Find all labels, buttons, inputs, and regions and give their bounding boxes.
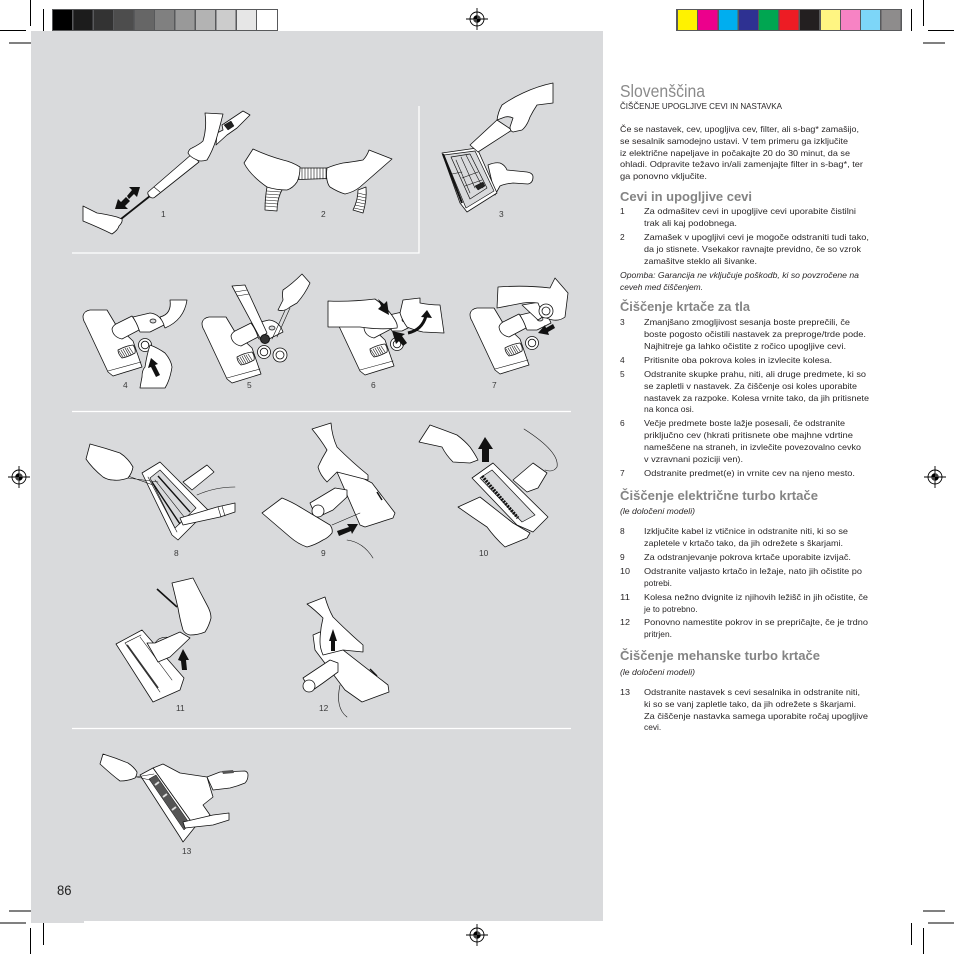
instructions 8 to 12: je to potrebno. xyxy=(643,604,698,614)
instructions 3 to 7: 4 xyxy=(620,355,625,365)
step number 8: 8 xyxy=(174,548,179,558)
instructions 1 and 2: 1 xyxy=(620,206,625,216)
illustration 2: squeezing the hose xyxy=(244,149,392,213)
step number 4: 4 xyxy=(123,380,128,390)
instructions 8 to 12: 9 xyxy=(620,552,625,562)
instructions 3 to 7: 6 xyxy=(620,418,625,428)
instructions 3 to 7: Pritisnite oba pokrova koles in izvlecite kolesa. xyxy=(644,355,832,365)
instructions 3 to 7: priključno cev (hkrati pritisnete obe majhne vdrtine xyxy=(644,430,853,440)
instructions 1 and 2: Za odmašitev cevi in upogljive cevi uporabite čistilni xyxy=(644,206,856,216)
divider under steps 4 to 7 xyxy=(72,410,571,412)
registration mark: bottom xyxy=(466,924,488,946)
step number 5: 5 xyxy=(247,380,252,390)
section heading: floor brush: Čiščenje krtače za tla xyxy=(620,299,751,314)
intro paragraph: iz električne napeljave in počakajte 20 do 30 minut, da se xyxy=(620,148,850,158)
models note: (le določeni modeli) xyxy=(620,507,695,516)
instructions 8 to 12 xyxy=(620,526,868,639)
instructions 8 to 12: pritrjen. xyxy=(644,629,672,639)
section heading: hoses: Cevi in upogljive cevi xyxy=(620,189,752,204)
instructions 3 to 7 xyxy=(620,317,869,478)
step number 3: 3 xyxy=(499,209,504,219)
divider under steps 8 to 12 xyxy=(72,728,571,730)
process colour bar xyxy=(676,9,902,31)
instruction 13: ki so se vanj zapletle tako, da jih odrežete s škarjami. xyxy=(644,699,856,709)
illustration 12: refitting the cover xyxy=(303,597,389,717)
step number 11: 11 xyxy=(176,703,185,713)
page number: 86 xyxy=(57,882,72,898)
step number 9: 9 xyxy=(321,548,326,558)
illustration 10: removing roller brush xyxy=(419,425,557,547)
step number 10: 10 xyxy=(479,548,489,558)
instructions 3 to 7: Najhitreje ga lahko očistite z ročico upogljive cevi. xyxy=(644,341,846,351)
illustration 8: cutting threads with scissors xyxy=(86,444,235,540)
instructions 3 to 7: nastavek za razpoke. Kolesa vrnite tako, da jih pritisnete xyxy=(644,393,869,403)
illustration 11: lifting the wheels xyxy=(116,578,211,702)
illustration 5: crevice tool on wheel axle xyxy=(202,274,310,383)
step number 2: 2 xyxy=(321,209,326,219)
illustration 9: removing brush cover with screwdriver xyxy=(262,423,395,558)
intro paragraph: ohladi. Odpravite težavo in/ali zamenjajte filter in s-bag*, ter xyxy=(620,159,863,169)
instructions 3 to 7: 5 xyxy=(620,369,625,379)
section heading: mechanical turbo brush: Čiščenje mehanske turbo krtače xyxy=(620,648,820,663)
instructions 3 to 7: Zmanjšano zmogljivost sesanja boste preprečili, če xyxy=(644,317,850,327)
instructions 3 to 7: na konca osi. xyxy=(644,404,694,414)
intro paragraph: se sesalnik samodejno ustavi. V tem primeru ga izključite xyxy=(620,136,848,146)
registration mark: right xyxy=(924,466,946,488)
instructions 8 to 12: potrebi. xyxy=(644,578,672,588)
instructions 3 to 7: nameščene na straneh, in izvlečite povezovalno cevko xyxy=(644,442,861,452)
step number 1: 1 xyxy=(161,209,166,219)
instruction 13: cevi. xyxy=(644,722,661,732)
instructions 1 and 2: da jo stisnete. Vsekakor ravnajte previdno, če so vzrok xyxy=(644,244,862,254)
greyscale colour bar xyxy=(52,9,278,31)
instructions 1 and 2: zamašitve steklo ali šivanke. xyxy=(644,256,757,266)
step number 13: 13 xyxy=(182,846,192,856)
instructions 3 to 7: 7 xyxy=(620,468,625,478)
instruction 13: Odstranite nastavek s cevi sesalnika in odstranite niti, xyxy=(644,687,860,697)
white frame around steps 1 and 2 xyxy=(72,106,419,253)
instructions 3 to 7: 3 xyxy=(620,317,625,327)
instructions 8 to 12: Ponovno namestite pokrov in se prepričajte, če je trdno xyxy=(644,617,868,627)
instructions 8 to 12: 11 xyxy=(620,592,630,602)
grey illustration panel xyxy=(31,31,603,923)
registration mark: left xyxy=(8,466,30,488)
illustration 13: cutting threads on mechanical turbo brush xyxy=(100,754,248,842)
instructions 3 to 7: Odstranite skupke prahu, niti, ali druge predmete, ki so xyxy=(644,369,866,379)
instructions 1 and 2: Zamašek v upogljivi cevi je mogoče odstraniti tudi tako, xyxy=(644,232,869,242)
illustration 6: removing connector tube xyxy=(328,298,444,375)
instructions 3 to 7: se zapletli v nastavek. Za čiščenje osi koles uporabite xyxy=(644,381,857,391)
instruction 13 xyxy=(620,687,868,732)
intro paragraph: Če se nastavek, cev, upogljiva cev, filter, ali s-bag* zamašijo, xyxy=(620,124,859,134)
illustration 3: cleaning nozzle with hose handle xyxy=(442,83,553,212)
instructions 3 to 7: boste pogosto očistili nastavek za preproge/trde pode. xyxy=(644,329,866,339)
warranty note xyxy=(620,271,860,292)
instructions 3 to 7: Odstranite predmet(e) in vrnite cev na njeno mesto. xyxy=(644,468,855,478)
illustration 4: pressing wheel covers xyxy=(83,300,187,388)
illustration 1: cleaning tube with strip xyxy=(83,111,250,234)
instructions 3 to 7: Večje predmete boste lažje posesali, če odstranite xyxy=(644,418,845,428)
illustration 7: replacing connector tube xyxy=(470,278,568,374)
instructions 1 and 2: trak ali kaj podobnega. xyxy=(644,218,737,228)
instructions 8 to 12: 8 xyxy=(620,526,625,536)
subtitle: ČIŠČENJE UPOGLJIVE CEVI IN NASTAVKA xyxy=(620,101,782,111)
instructions 8 to 12: Odstranite valjasto krtačo in ležaje, nato jih očistite po xyxy=(644,566,862,576)
step number 6: 6 xyxy=(371,380,376,390)
instructions 8 to 12: Za odstranjevanje pokrova krtače uporabite izvijač. xyxy=(644,552,851,562)
instructions 8 to 12: Kolesa nežno dvignite iz njihovih ležišč in jih očistite, če xyxy=(644,592,868,602)
instructions 3 to 7: v vzravnani poziciji ven). xyxy=(644,454,743,464)
title: Slovenščina xyxy=(620,81,705,101)
instruction 13: Za čiščenje nastavka samega uporabite ročaj upogljive xyxy=(644,711,868,721)
models note: (le določeni modeli) xyxy=(620,668,695,677)
warranty note: Opomba: Garancija ne vključuje poškodb, ki so povzročene na xyxy=(620,271,860,280)
step number 7: 7 xyxy=(492,380,497,390)
section heading: electric turbo brush: Čiščenje električne turbo krtače xyxy=(620,488,818,503)
instructions 8 to 12: zapletele v krtačo tako, da jih odrežete s škarjami. xyxy=(644,538,843,548)
registration mark: top xyxy=(466,8,488,30)
warranty note: ceveh med čiščenjem. xyxy=(620,283,703,292)
instructions 8 to 12: 10 xyxy=(620,566,630,576)
instructions 8 to 12: Izključite kabel iz vtičnice in odstranite niti, ki so se xyxy=(644,526,848,536)
instruction 13: 13 xyxy=(620,687,630,697)
instructions 1 and 2: 2 xyxy=(620,232,625,242)
intro paragraph: ga ponovno vključite. xyxy=(620,171,707,181)
intro paragraph xyxy=(620,124,863,181)
instructions 8 to 12: 12 xyxy=(620,617,630,627)
step number 12: 12 xyxy=(319,703,329,713)
instructions 1 and 2 xyxy=(620,206,869,266)
